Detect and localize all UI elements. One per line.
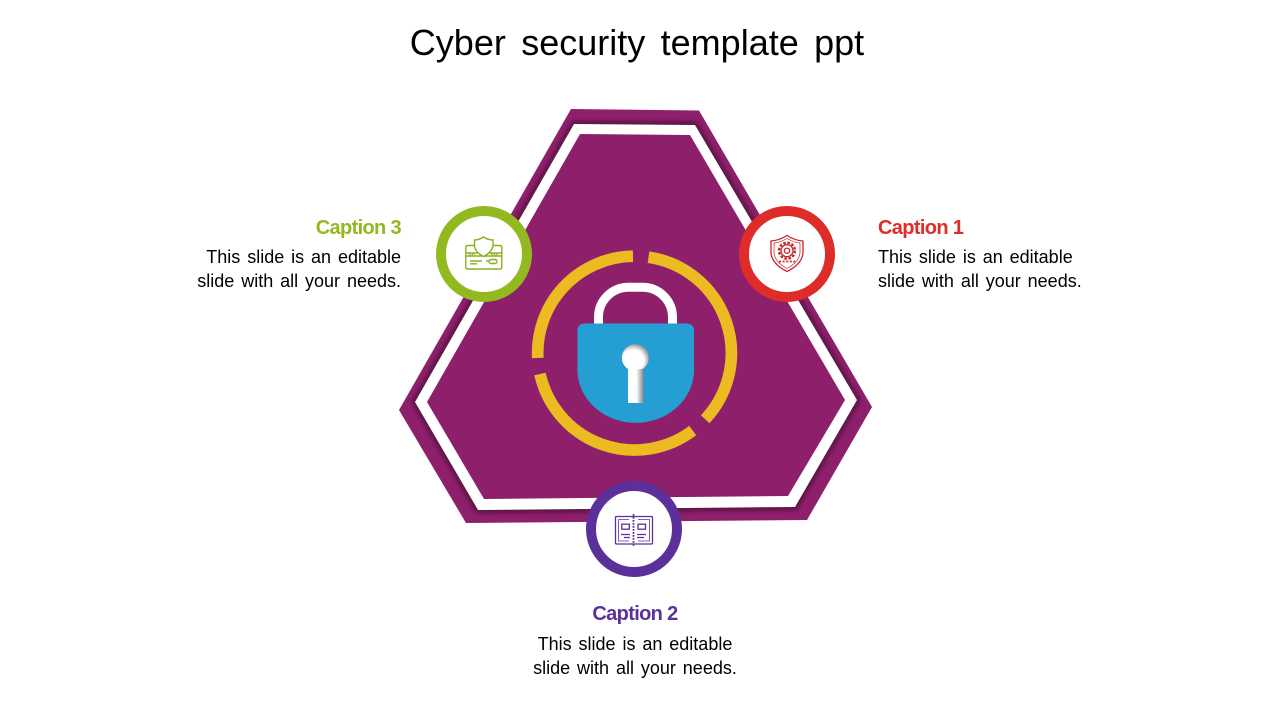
caption 3 heading: Caption 3 [316, 217, 401, 239]
caption 3 body: slide with all your needs. [197, 271, 401, 291]
caption 2 body: slide with all your needs. [533, 658, 737, 678]
title: Cyber security template ppt [410, 22, 864, 63]
icon: card with shield [466, 237, 502, 269]
caption 2 body: This slide is an editable [538, 634, 732, 654]
badge: caption 1 [744, 211, 830, 297]
caption 1 body: slide with all your needs. [878, 271, 1082, 291]
yellow segmented ring [538, 256, 731, 450]
caption 1 heading: Caption 1 [878, 217, 963, 239]
caption 2 text block [533, 603, 737, 678]
icon: booklet [616, 514, 652, 546]
badge: caption 2 [591, 486, 677, 572]
white hexagon band [415, 124, 857, 510]
caption 1 body: This slide is an editable [878, 247, 1073, 267]
padlock [578, 287, 694, 423]
caption 1 body [878, 247, 1082, 291]
outer hexagon [399, 109, 872, 523]
caption 2 heading: Caption 2 [592, 603, 678, 625]
caption 1 text block [878, 217, 1082, 291]
keyhole [622, 344, 649, 403]
hexagon and lock diagram [399, 109, 872, 577]
caption 2 body [533, 634, 737, 678]
lock body [578, 324, 694, 423]
caption 3 body [197, 247, 401, 291]
inner hexagon [427, 134, 845, 499]
shackle [598, 287, 672, 324]
caption 3 body: This slide is an editable [206, 247, 401, 267]
icon: shield with gear [771, 236, 803, 272]
caption 3 text block [197, 217, 401, 291]
badge: caption 3 [441, 211, 527, 297]
